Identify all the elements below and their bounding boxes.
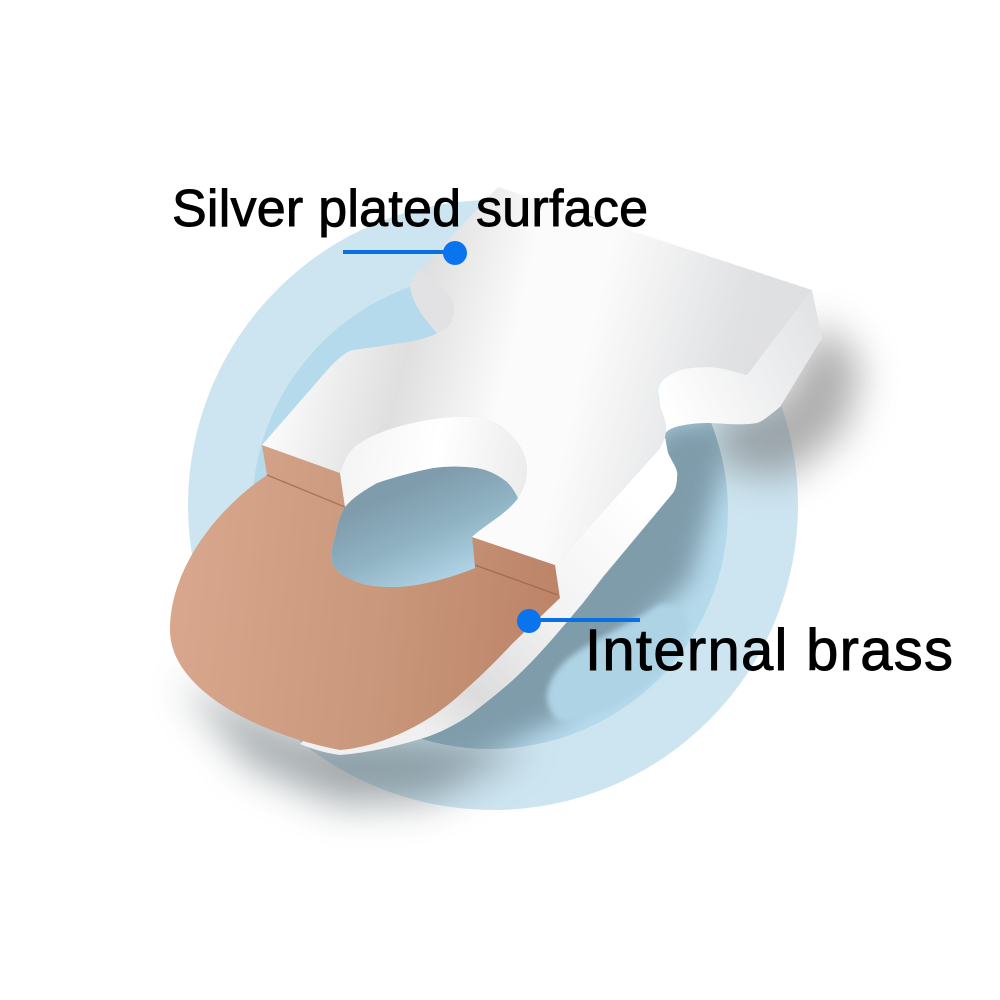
metal part [170, 187, 822, 755]
brass core [170, 445, 560, 750]
shadow: right side grey [715, 320, 862, 478]
background circle: outer ring [188, 200, 798, 810]
hole opening [332, 466, 518, 587]
marker dot: brass [517, 609, 541, 633]
notch side wall [410, 270, 454, 333]
marker dot: silver [443, 241, 467, 265]
leader line: brass [530, 618, 640, 622]
silver top surface [262, 187, 812, 565]
hole wall [340, 417, 527, 507]
label: silver plated surface: Silver plated surface [172, 180, 648, 238]
infographic: plated terminal cross-section [170, 187, 952, 829]
label: silver plated surface [172, 180, 648, 265]
leader line: silver [343, 250, 445, 254]
shadow: bottom left [180, 680, 530, 805]
shadow: dark area on disc [421, 423, 728, 749]
brass section lines [267, 475, 558, 595]
silver lower side wall [300, 437, 677, 755]
light reflection blob [547, 604, 689, 722]
background circle: inner disc [252, 273, 728, 749]
silver right side wall [658, 290, 822, 437]
label: internal brass: Internal brass [585, 618, 953, 683]
cast shadows under part [180, 320, 862, 805]
